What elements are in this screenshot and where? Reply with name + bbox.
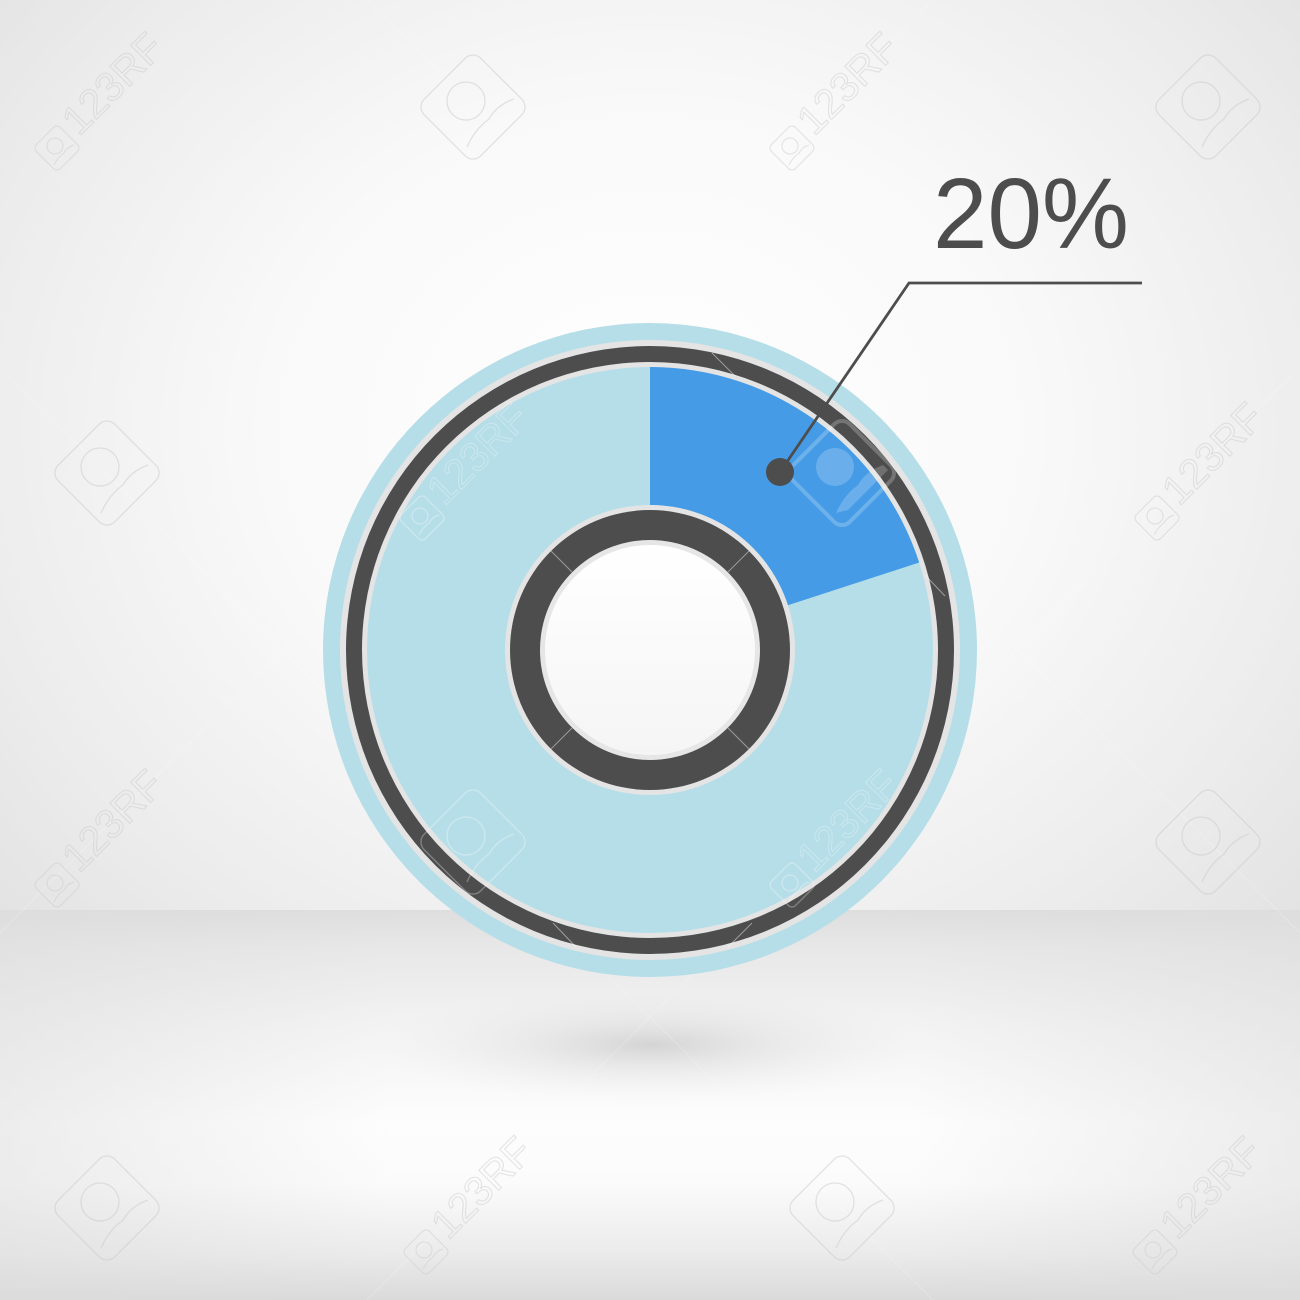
segment: highlighted 20% (650, 367, 919, 605)
dark outer ring with light borders (340, 340, 960, 960)
watermarks: 123RF logos: 123RF (1153, 394, 1272, 513)
centre hole (545, 545, 755, 755)
callout leader line (780, 283, 1142, 472)
watermark over chart: 123RF (788, 761, 907, 880)
callout dot (766, 458, 794, 486)
watermarks: 123RF logos: 123RF (422, 1128, 541, 1247)
floor shadow under the chart (370, 987, 930, 1103)
watermark over chart (398, 394, 907, 909)
percentage label: 20% (933, 158, 1129, 270)
segment: remaining 80% (367, 367, 933, 933)
donut chart (323, 323, 977, 977)
background: floor (0, 910, 1300, 1300)
watermarks: 123RF logos: 123RF (1151, 1128, 1270, 1247)
watermarks: 123RF logos: 123RF (788, 24, 907, 143)
watermarks: 123RF logos: 123RF (53, 24, 172, 143)
outer light blue ring (323, 323, 977, 977)
watermarks: 123RF logos: 123RF (788, 761, 907, 880)
watermarks: 123RF logos: 123RF (53, 761, 172, 880)
background: wall (0, 0, 1300, 910)
inner dark ring with light borders (505, 505, 795, 795)
watermark over chart: 123RF (418, 394, 537, 513)
